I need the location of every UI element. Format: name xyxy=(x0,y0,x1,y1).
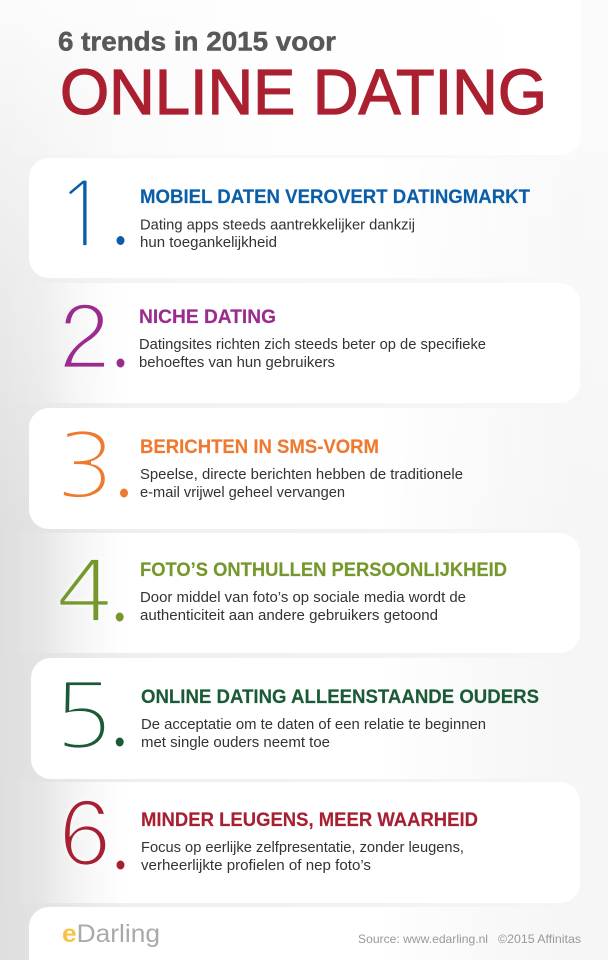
logo: eDarling: eDarling xyxy=(62,920,160,948)
panel: trend 6 xyxy=(0,782,580,903)
number 3: 3 xyxy=(56,422,115,511)
panel: trend 4 xyxy=(0,533,580,653)
dot xyxy=(116,738,124,746)
body text xyxy=(141,840,464,874)
body text: behoeftes van hun gebruikers xyxy=(139,355,335,371)
panel: trend 3 xyxy=(29,408,608,529)
body text xyxy=(139,337,486,371)
body text: hun toegankelijkheid xyxy=(140,235,277,251)
body text: verheerlijkte profielen of nep foto’s xyxy=(141,858,371,874)
body text: De acceptatie om te daten of een relatie te beginnen xyxy=(141,717,486,733)
copyright: ©2015 Affinitas xyxy=(498,932,581,946)
dot xyxy=(116,358,124,368)
heading: NICHE DATING xyxy=(139,306,276,328)
dot xyxy=(116,236,124,245)
heading: ONLINE DATING ALLEENSTAANDE OUDERS xyxy=(141,686,539,708)
panel: trend 1 xyxy=(29,158,608,278)
panel: footer xyxy=(29,907,608,960)
body text: Speelse, directe berichten hebben de traditionele xyxy=(140,467,463,483)
body text xyxy=(141,717,486,751)
dot xyxy=(120,488,128,498)
panel: header xyxy=(0,0,581,155)
body text: Focus op eerlijke zelfpresentatie, zonder leugens, xyxy=(141,840,464,856)
number 2: 2 xyxy=(58,293,111,384)
number 6: 6 xyxy=(58,790,112,880)
body text xyxy=(140,590,466,624)
body text: authenticiteit aan andere gebruikers getoond xyxy=(140,608,438,624)
number 5: 5 xyxy=(53,671,113,761)
body text xyxy=(140,467,463,501)
dot xyxy=(116,860,124,870)
body text: Door middel van foto’s op sociale media wordt de xyxy=(140,590,466,606)
source: Source: www.edarling.nl xyxy=(358,932,488,946)
heading: MINDER LEUGENS, MEER WAARHEID xyxy=(141,809,478,831)
heading: FOTO’S ONTHULLEN PERSOONLIJKHEID xyxy=(140,559,507,581)
heading: BERICHTEN IN SMS-VORM xyxy=(140,436,379,458)
dot xyxy=(116,612,124,622)
panel: trend 5 xyxy=(31,658,608,779)
number 1: 1 xyxy=(55,169,109,259)
body text xyxy=(140,218,415,251)
body text: e-mail vrijwel geheel vervangen xyxy=(140,485,345,501)
body text: Datingsites richten zich steeds beter op de specifieke xyxy=(139,337,486,353)
title: ONLINE DATING xyxy=(60,56,547,128)
body text: met single ouders neemt toe xyxy=(141,735,330,751)
body text: Dating apps steeds aantrekkelijker dankzij xyxy=(140,218,415,234)
number 4: 4 xyxy=(56,547,112,637)
heading: MOBIEL DATEN VEROVERT DATINGMARKT xyxy=(140,186,530,208)
subtitle: 6 trends in 2015 voor xyxy=(58,26,337,56)
panel: trend 2 xyxy=(0,283,580,403)
